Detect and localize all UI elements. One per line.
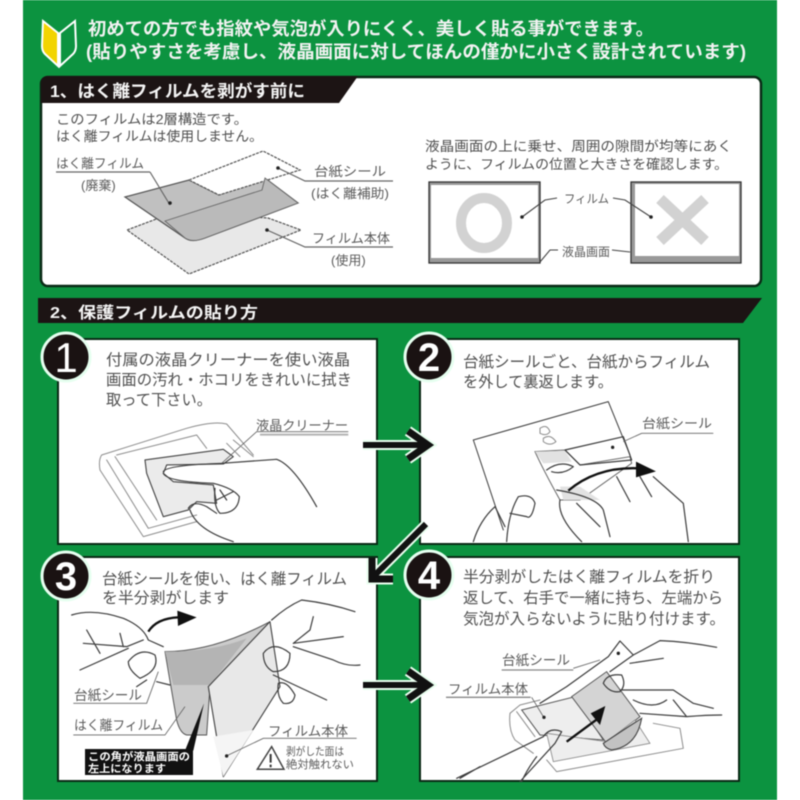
label: backing sticker: 台紙シール bbox=[642, 416, 712, 431]
labels: film layers: はく離フィルム bbox=[56, 156, 144, 171]
text: two-layer note: はく離フィルムは使用しません。 bbox=[56, 128, 263, 144]
title bbox=[86, 18, 746, 62]
text: step 4: 半分剥がしたはく離フィルムを折り bbox=[463, 568, 715, 586]
illustration: peeling film in half bbox=[72, 600, 360, 777]
text: step 4: 気泡が入らないように貼り付けます。 bbox=[463, 610, 725, 628]
labels: step 4 parts: フィルム本体 bbox=[448, 682, 528, 697]
labels: film and screen: フィルム bbox=[564, 192, 609, 206]
illustration: applying film bbox=[446, 641, 722, 782]
panel: step 4 bbox=[420, 557, 739, 782]
panel: step 1 bbox=[58, 339, 377, 544]
heading: section 1: 1、はく離フィルムを剥がす前に bbox=[50, 81, 305, 101]
labels: step 4 parts bbox=[448, 653, 570, 697]
panel: step 3 bbox=[58, 557, 377, 781]
diagram: correct placement bbox=[429, 182, 540, 263]
text: step 1 bbox=[106, 351, 352, 409]
warning note: 剥がした面は bbox=[286, 744, 344, 758]
labels: film layers: (はく離補助) bbox=[311, 186, 389, 201]
text: step 2: 台紙シールごと、台紙からフィルム bbox=[463, 353, 710, 371]
warning note: 絶対触れない bbox=[286, 757, 354, 771]
heading: section 2: 2、保護フィルムの貼り方 bbox=[50, 303, 258, 322]
heading: section 1 bbox=[41, 76, 358, 103]
text: step 4 bbox=[463, 568, 725, 628]
badge: step 1: 1 bbox=[54, 334, 78, 381]
diagram: film layers bbox=[125, 151, 393, 274]
callout: film corner bbox=[85, 749, 193, 775]
text: step 1: 取って下さい。 bbox=[106, 391, 212, 409]
arrow: step 2 to 3 bbox=[372, 524, 426, 579]
labels: step 3 parts: 台紙シール bbox=[74, 688, 142, 703]
text: step 3: を半分剥がします bbox=[102, 589, 229, 607]
labels: film layers: (使用) bbox=[331, 253, 366, 268]
text: step 3: 台紙シールを使い、はく離フィルム bbox=[102, 570, 347, 588]
labels: film layers: (廃棄) bbox=[81, 178, 116, 193]
badge: step 2 bbox=[405, 333, 453, 381]
labels: step 4 parts: 台紙シール bbox=[502, 653, 570, 668]
arrow: step 3 to 4 bbox=[363, 671, 428, 699]
badge: step 4: 4 bbox=[418, 554, 441, 598]
title: 初めての方でも指紋や気泡が入りにくく、美しく貼る事ができます。 bbox=[88, 18, 654, 39]
text: alignment note: ように、フィルムの位置と大きさを確認します。 bbox=[425, 157, 728, 172]
text: step 3 bbox=[102, 570, 347, 607]
label: liquid crystal cleaner: 液晶クリーナー bbox=[256, 418, 348, 433]
diagram: incorrect placement bbox=[631, 182, 741, 263]
badge: step 3 bbox=[42, 552, 90, 600]
badge: step 4 bbox=[405, 551, 453, 599]
text: step 4: 返して、右手で一緒に持ち、左端から bbox=[463, 589, 723, 607]
labels: step 3 parts: フィルム本体 bbox=[268, 724, 348, 739]
callout: film corner: この角が液晶画面の bbox=[88, 750, 190, 763]
badge: step 1 bbox=[42, 333, 90, 381]
labels: film layers: 台紙シール bbox=[314, 164, 386, 179]
text: alignment note bbox=[425, 138, 732, 172]
callout: film corner: 左上になります bbox=[88, 762, 166, 775]
title: (貼りやすさを考慮し、液晶画面に対してほんの僅かに小さく設計されています) bbox=[86, 42, 746, 62]
labels: film and screen bbox=[520, 192, 653, 262]
panel: step 2 bbox=[420, 339, 739, 544]
arrow: step 1 to 2 bbox=[363, 431, 428, 459]
labels: film layers: フィルム本体 bbox=[312, 231, 390, 246]
icon: beginner leaf mark bbox=[42, 21, 76, 66]
text: step 1: 画面の汚れ・ホコリをきれいに拭き bbox=[106, 371, 352, 389]
labels: film layers bbox=[56, 156, 390, 268]
badge: step 2: 2 bbox=[418, 336, 440, 380]
text: step 1: 付属の液晶クリーナーを使い液晶 bbox=[106, 351, 350, 369]
labels: step 3 parts: はく離フィルム bbox=[74, 718, 163, 733]
text: two-layer note bbox=[56, 112, 263, 144]
text: step 2 bbox=[463, 353, 710, 391]
illustration: wiping screen bbox=[99, 423, 348, 542]
warning note bbox=[286, 744, 354, 771]
badge: step 3: 3 bbox=[55, 555, 77, 599]
labels: step 3 parts bbox=[74, 688, 348, 739]
text: two-layer note: このフィルムは2層構造です。 bbox=[56, 112, 248, 127]
labels: film and screen: 液晶画面 bbox=[562, 245, 610, 259]
text: step 2: を外して裏返します。 bbox=[463, 373, 613, 391]
panel: before peeling bbox=[41, 76, 761, 286]
illustration: flipping film bbox=[473, 402, 713, 542]
heading: section 2 bbox=[38, 298, 762, 323]
text: alignment note: 液晶画面の上に乗せ、周囲の隙間が均等にあく bbox=[425, 138, 732, 154]
